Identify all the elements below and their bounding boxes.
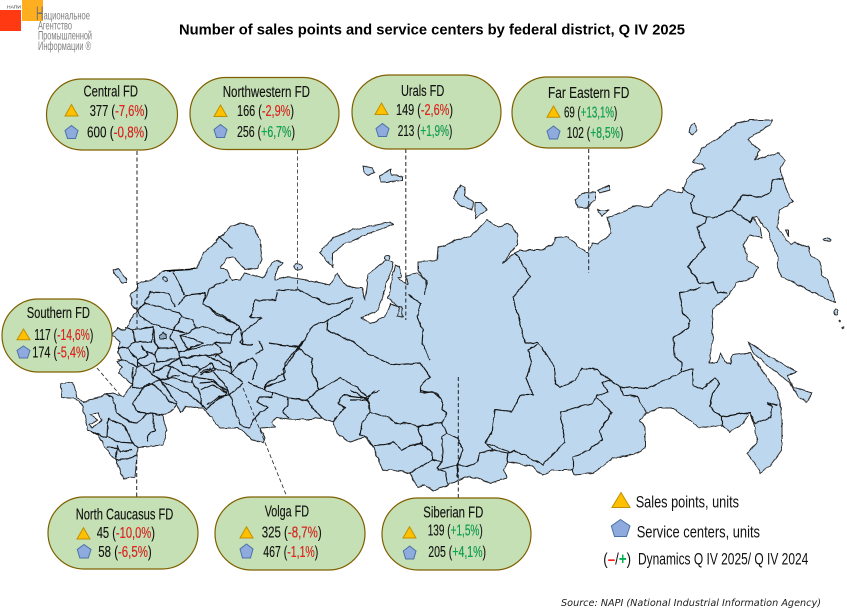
panel: Siberian FD: 205 (+4,1%): [428, 544, 486, 561]
panel: Urals FD: [352, 75, 501, 149]
panel: Volga FD: 467 (-1,1%): [263, 544, 318, 561]
panel: North Caucasus FD: North Caucasus FD: [76, 506, 173, 523]
source note: Source: NAPI (National Industrial Information Agency): [561, 598, 821, 609]
regional borders: [88, 178, 783, 485]
legend: [603, 492, 808, 569]
logo: NAPI: ациональное: [44, 10, 90, 22]
logo: NAPI: [0, 0, 92, 53]
panel: Southern FD: 117 (-14,6%): [34, 327, 93, 344]
panel: Volga FD: 325 (-8,7%): [262, 524, 322, 541]
legend: Sales points, units: [636, 494, 739, 512]
panel: North Caucasus FD: [48, 497, 198, 569]
panel: Far Eastern FD: 69 (+13,1%): [564, 105, 617, 122]
legend: (–/+): [603, 551, 631, 569]
panel: Central FD: 377 (-7,6%): [90, 103, 148, 120]
leader lines: [97, 149, 589, 498]
panel: Central FD: Central FD: [84, 84, 138, 100]
legend: Service centers, units: [637, 523, 760, 541]
panel: Volga FD: Volga FD: [265, 504, 309, 521]
panel: Siberian FD: Siberian FD: [423, 505, 483, 522]
mainland: [60, 120, 835, 491]
panel: North Caucasus FD: 58 (-6,5%): [98, 544, 152, 561]
panel: Urals FD: Urals FD: [401, 83, 444, 100]
logo: NAPI: НАПИ: [7, 4, 22, 10]
panel: Far Eastern FD: Far Eastern FD: [548, 85, 629, 102]
panel: Southern FD: 174 (-5,4%): [32, 345, 89, 362]
Finland border: [163, 269, 197, 271]
lakes and Moscow: [90, 277, 167, 428]
islands: [113, 123, 844, 402]
panel: Northwestern FD: [190, 78, 339, 150]
panel: Volga FD: [215, 497, 365, 570]
panel: Northwestern FD: 256 (+6,7%): [237, 124, 295, 141]
panel: Southern FD: Southern FD: [27, 305, 90, 322]
logo: NAPI: Информации ®: [38, 41, 91, 53]
panel: Far Eastern FD: [512, 77, 662, 148]
panel: Central FD: [46, 79, 178, 150]
map of Russia by federal district: [60, 120, 844, 491]
panel: Urals FD: 149 (-2,6%): [396, 102, 453, 119]
logo: NAPI: Н: [36, 4, 44, 25]
logo: NAPI: Агентство: [38, 20, 72, 32]
panel: North Caucasus FD: 45 (-10,0%): [97, 525, 155, 542]
title: Number of sales points and service centers by federal district, Q IV 2025: [179, 22, 685, 38]
panel: Central FD: 600 (-0,8%): [87, 125, 148, 142]
panel: Northwestern FD: Northwestern FD: [223, 84, 310, 101]
panel: Urals FD: 213 (+1,9%): [398, 123, 452, 140]
panel: Siberian FD: [382, 498, 531, 570]
panel: Siberian FD: 139 (+1,5%): [428, 523, 483, 540]
logo: NAPI: Промышленной: [38, 30, 92, 42]
panel: Northwestern FD: 166 (-2,9%): [237, 103, 294, 120]
panel: Far Eastern FD: 102 (+8,5%): [567, 125, 623, 142]
panel: Southern FD: [2, 299, 112, 372]
